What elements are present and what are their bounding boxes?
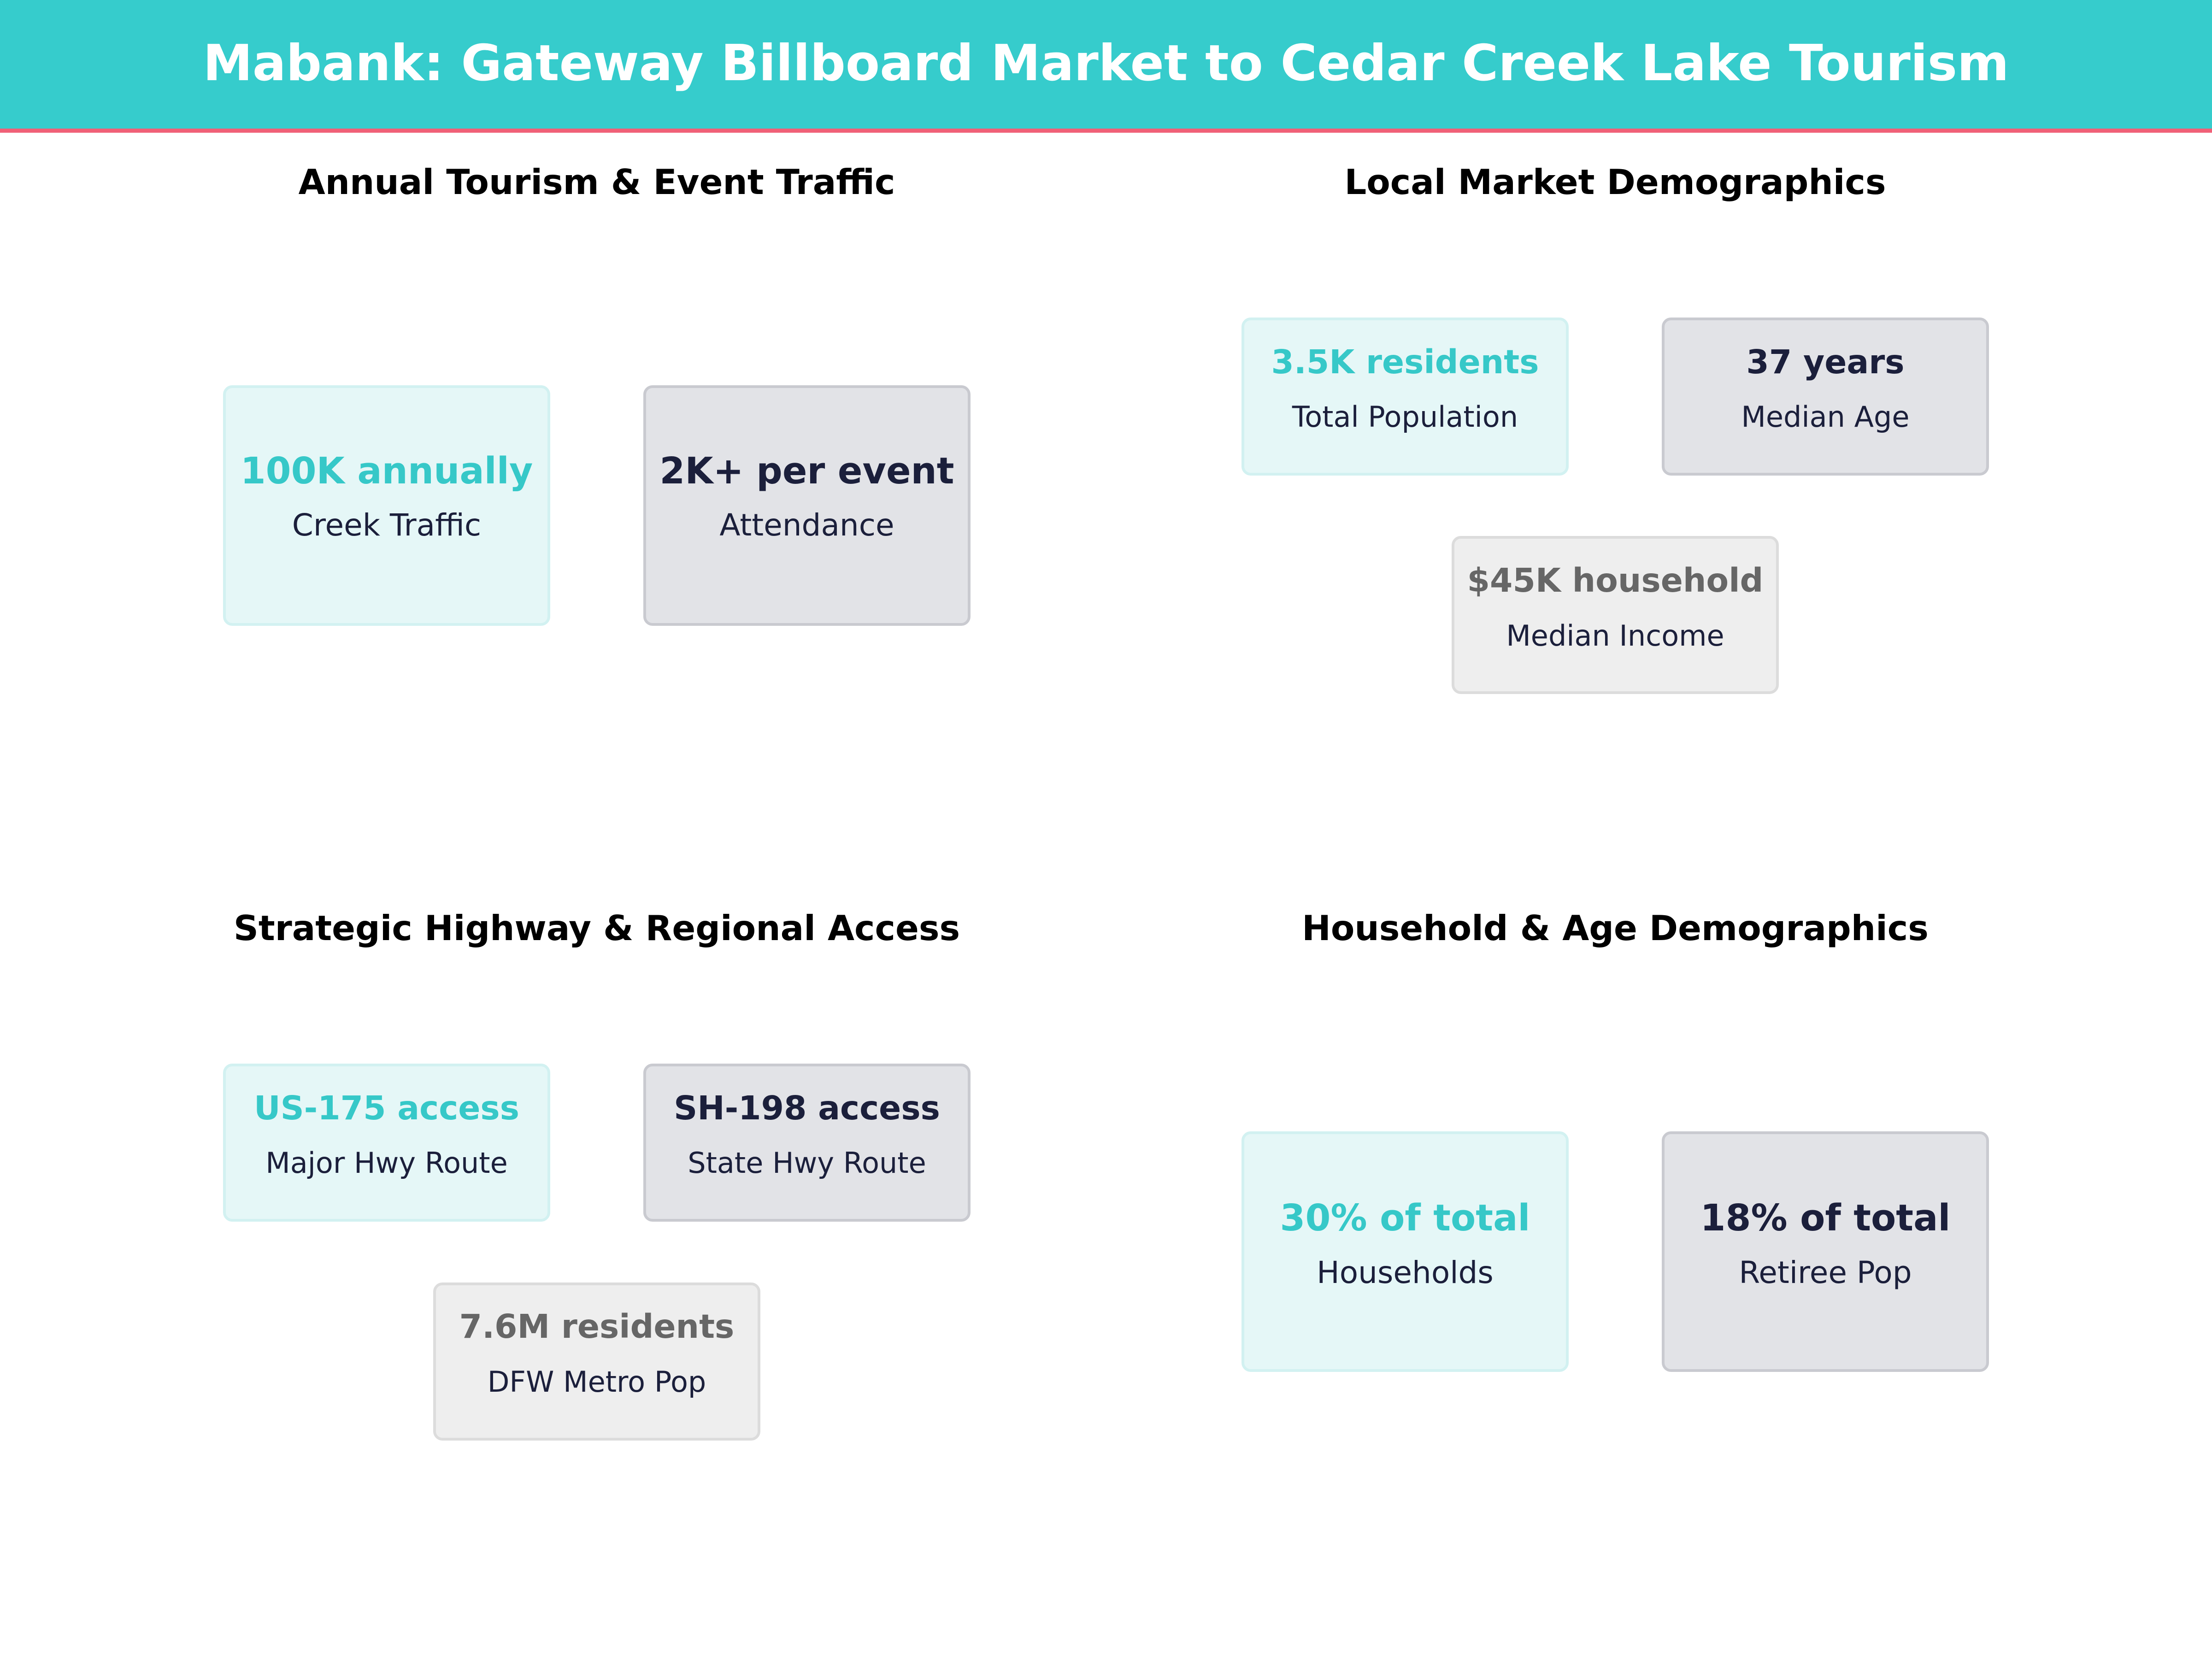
heading: Household & Age Demographics: Household & Age Demographics: [1302, 908, 1929, 948]
card: 18% of total: Retiree Pop: [1739, 1255, 1912, 1290]
card: 2K+ per event: 2K+ per event: [659, 450, 954, 492]
card: 7.6M residents: DFW Metro Pop: [488, 1365, 706, 1399]
card: SH-198 access: [643, 1064, 971, 1222]
card: 3.5K residents: 3.5K residents: [1271, 343, 1539, 381]
card: 7.6M residents: 7.6M residents: [459, 1307, 734, 1346]
header: title banner: Mabank: Gateway Billboard Market to Cedar Creek Lake Tourism: [203, 35, 2009, 92]
card: $45K household: [1452, 536, 1779, 694]
card: US-175 access: [223, 1064, 550, 1222]
card: 2K+ per event: [643, 385, 971, 626]
card: 37 years: 37 years: [1746, 343, 1905, 381]
card: 37 years: Median Age: [1741, 400, 1910, 434]
card: 30% of total: Households: [1317, 1255, 1494, 1290]
header: title banner: [0, 0, 2212, 133]
card: 30% of total: 30% of total: [1280, 1197, 1530, 1239]
heading: Annual Tourism & Event Traffic: Annual Tourism & Event Traffic: [299, 162, 895, 202]
card: 30% of total: [1241, 1131, 1569, 1372]
card: SH-198 access: SH-198 access: [674, 1089, 940, 1127]
card: $45K household: Median Income: [1506, 619, 1724, 653]
card: 100K annually: [223, 385, 550, 626]
heading: Local Market Demographics: Local Market Demographics: [1344, 162, 1886, 202]
card: 2K+ per event: Attendance: [719, 507, 894, 543]
card: 18% of total: [1662, 1131, 1989, 1372]
card: 7.6M residents: [433, 1282, 760, 1441]
heading: Strategic Highway & Regional Access: Strategic Highway & Regional Access: [234, 908, 960, 948]
card: US-175 access: Major Hwy Route: [265, 1146, 508, 1180]
card: US-175 access: US-175 access: [254, 1089, 519, 1127]
card: SH-198 access: State Hwy Route: [688, 1146, 926, 1180]
card: 37 years: [1662, 318, 1989, 476]
card: 100K annually: 100K annually: [241, 450, 533, 492]
card: 100K annually: Creek Traffic: [292, 507, 481, 543]
card: $45K household: $45K household: [1467, 561, 1763, 600]
card: 18% of total: 18% of total: [1700, 1197, 1950, 1239]
card: 3.5K residents: [1241, 318, 1569, 476]
card: 3.5K residents: Total Population: [1292, 400, 1518, 434]
